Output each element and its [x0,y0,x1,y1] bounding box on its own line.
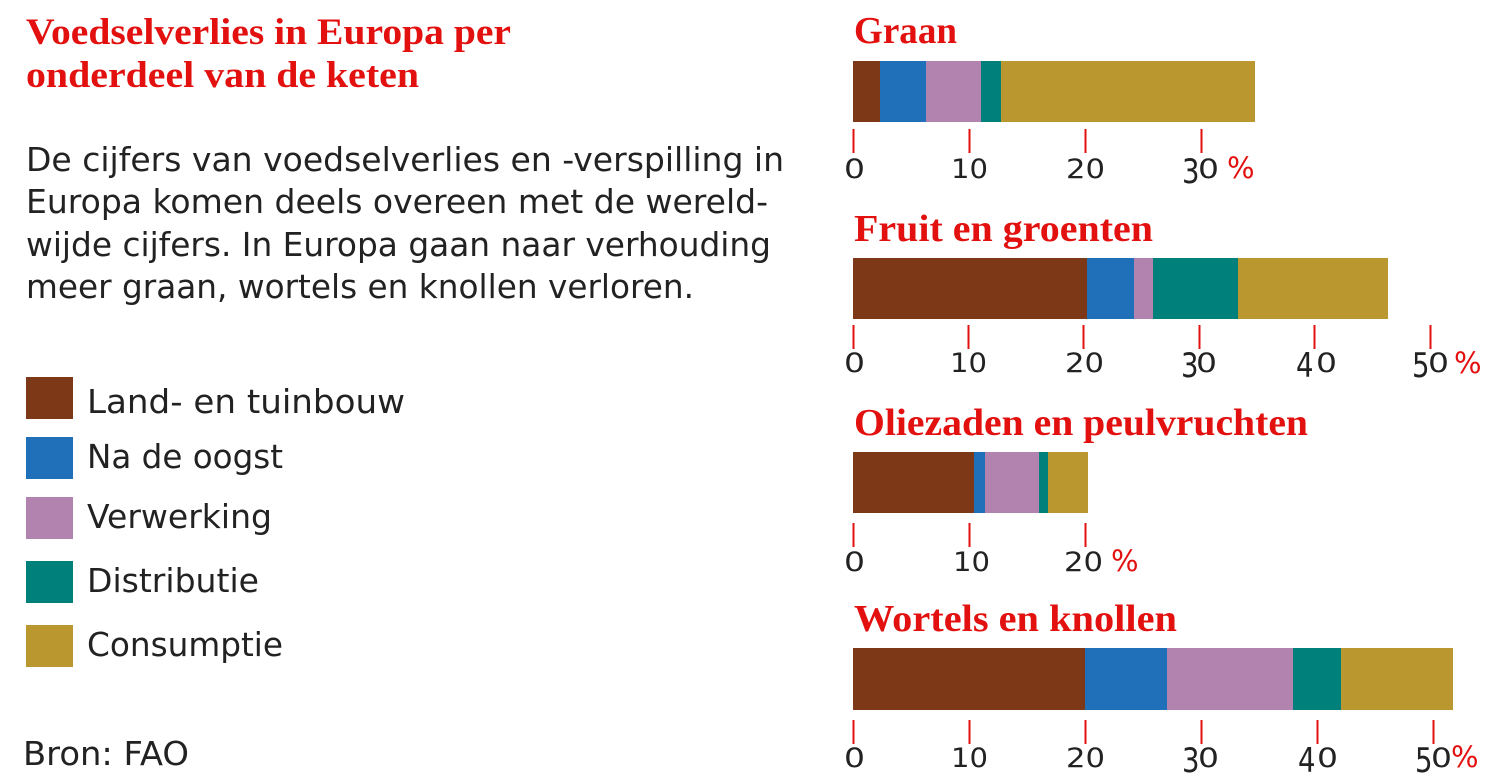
intro text [26,140,784,306]
chart: Oliezaden en peulvruchten: 10 [953,547,990,578]
chart: Graan: Graan [854,10,957,52]
chart: Fruit en groenten: 4 [1296,348,1314,386]
chart: Graan: 3 [1182,154,1200,192]
chart: Fruit en groenten: % [1454,346,1482,380]
title: Voedselverlies in Europa per [26,12,511,53]
chart: Oliezaden en peulvruchten: 0 [844,547,865,578]
chart: Fruit en groenten: 10 [950,348,987,379]
chart: Wortels en knollen: % [1451,740,1479,774]
intro text: wijde cijfers. In Europa gaan naar verhouding [26,225,771,264]
chart: Oliezaden en peulvruchten: 20 [1064,547,1103,578]
chart: Fruit en groenten: 3 [1181,348,1199,386]
legend: Na de oogst [87,437,283,476]
chart: Fruit en groenten: 20 [1065,348,1104,379]
legend [26,377,405,667]
chart: Wortels en knollen: 0 [1317,743,1338,774]
chart: Fruit en groenten: 0 [1316,348,1337,379]
chart: Fruit en groenten: 0 [1196,348,1217,379]
chart: Wortels en knollen: 4 [1298,743,1316,781]
chart: Wortels en knollen: Wortels en knollen [854,598,1177,640]
chart: Fruit en groenten: 5 [1412,348,1430,386]
chart: Fruit en groenten: Fruit en groenten [854,208,1153,250]
legend: Distributie [87,561,259,600]
title: onderdeel van de keten [26,55,419,96]
chart: Wortels en knollen [844,598,1479,781]
intro text: meer graan, wortels en knollen verloren. [26,267,694,306]
intro text: De cijfers van voedselverlies en -verspilling in [26,140,784,179]
chart: Graan: 0 [844,154,865,185]
chart: Fruit en groenten: 0 [1428,348,1449,379]
chart: Graan: 0 [1198,154,1219,185]
chart: Graan [844,10,1255,192]
chart: Graan: 20 [1066,154,1105,185]
chart: Wortels en knollen: 3 [1182,743,1200,781]
legend: Verwerking [87,497,272,536]
chart: Wortels en knollen: 0 [844,743,865,774]
chart: Wortels en knollen: 5 [1415,743,1433,781]
chart: Fruit en groenten: 0 [844,348,865,379]
chart: Graan: 10 [951,154,988,185]
chart: Wortels en knollen: 0 [1431,743,1452,774]
chart: Wortels en knollen: 20 [1066,743,1105,774]
chart: Wortels en knollen: 0 [1198,743,1219,774]
chart: Oliezaden en peulvruchten: % [1111,544,1139,578]
chart: Graan: % [1227,151,1255,185]
legend: Land- en tuinbouw [87,382,405,421]
chart: Wortels en knollen: 10 [951,743,988,774]
intro text: Europa komen deels overeen met de wereld- [26,182,768,221]
legend: Consumptie [87,625,283,664]
source: Bron: FAO [23,734,189,773]
chart: Fruit en groenten [844,208,1482,386]
title [26,12,511,96]
chart: Oliezaden en peulvruchten: Oliezaden en peulvruchten [854,402,1308,444]
chart: Oliezaden en peulvruchten [844,402,1308,578]
